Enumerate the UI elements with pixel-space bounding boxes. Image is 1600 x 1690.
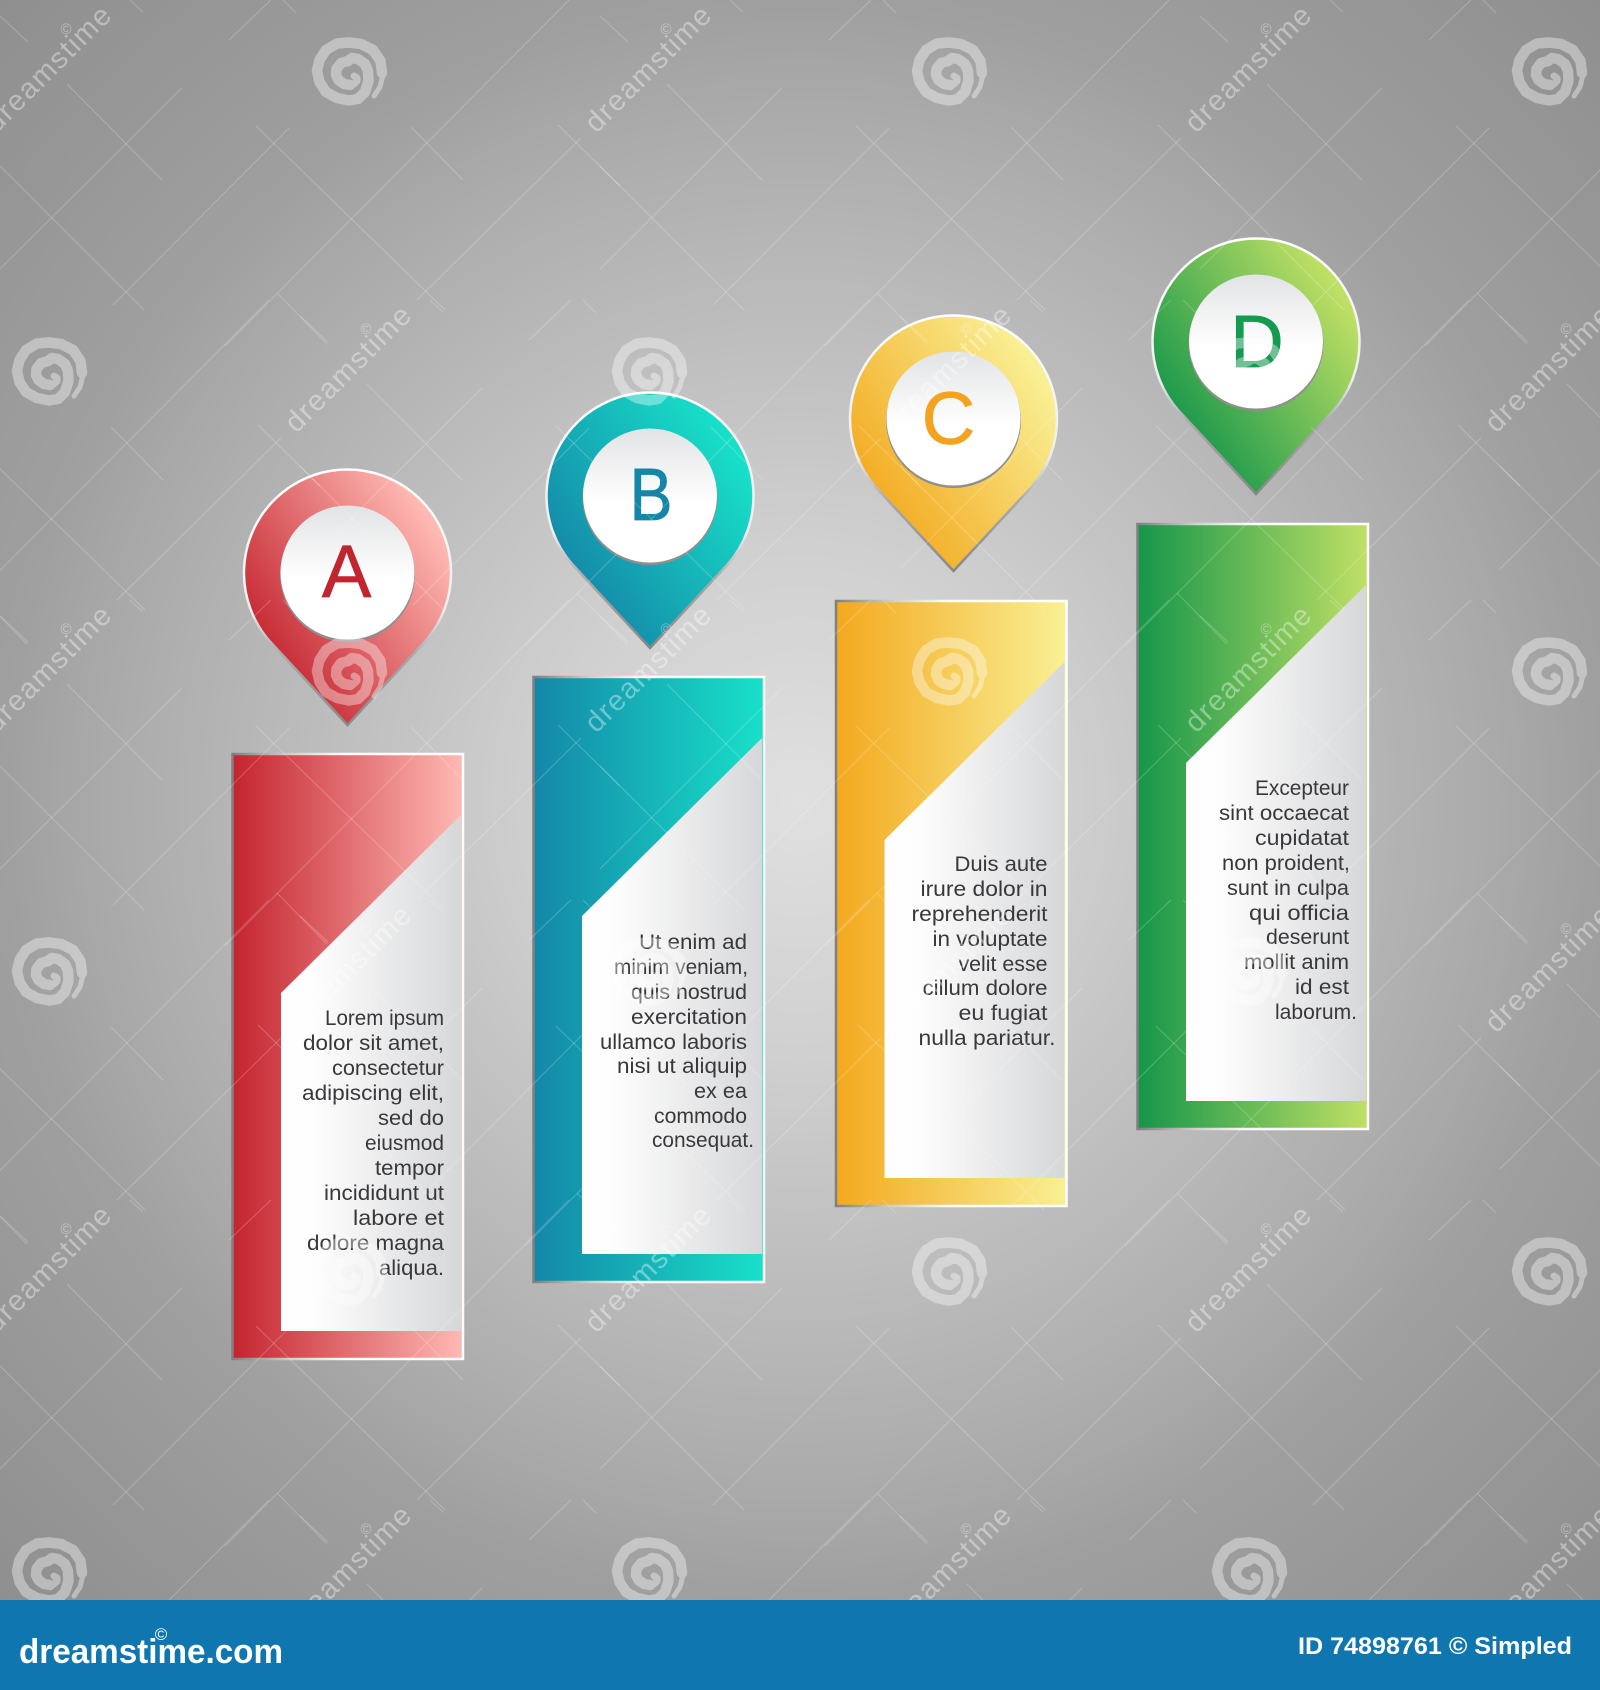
letter A: A xyxy=(322,530,372,613)
text C: cillum dolore xyxy=(922,976,1048,1000)
watermark overlay: © xyxy=(660,621,672,638)
text D xyxy=(1219,776,1357,1024)
text A: sed do xyxy=(378,1106,444,1130)
text B: ex ea xyxy=(694,1079,747,1103)
text D: sunt in culpa xyxy=(1227,876,1349,900)
text A: dolor sit amet, xyxy=(303,1031,444,1055)
footer credit: ID 74898761 © Simpled xyxy=(1298,1633,1572,1660)
watermark overlay: © xyxy=(1560,321,1572,338)
watermark overlay: © xyxy=(60,621,72,638)
watermark overlay: dreamstime xyxy=(579,1200,718,1339)
watermark overlay: © xyxy=(1260,1221,1272,1238)
footer logo: dreamstime.com xyxy=(19,1633,283,1671)
watermark overlay: © xyxy=(960,1521,972,1538)
footer bar xyxy=(0,1600,1600,1690)
text B: nisi ut aliquip xyxy=(617,1054,747,1078)
watermark overlay: © xyxy=(360,1521,372,1538)
watermark overlay: dreamstime xyxy=(279,900,418,1039)
watermark overlay: dreamstime xyxy=(879,900,1018,1039)
watermark overlay: © xyxy=(1560,921,1572,938)
text C: irure dolor in xyxy=(920,877,1048,901)
text A: labore et xyxy=(353,1206,444,1230)
pin A xyxy=(244,469,451,725)
watermark overlay: dreamstime xyxy=(1179,0,1318,139)
watermark overlay: dreamstime xyxy=(1179,1200,1318,1339)
text A: eiusmod xyxy=(365,1131,444,1155)
text A: aliqua. xyxy=(379,1256,444,1280)
text A: dolore magna xyxy=(307,1231,444,1255)
watermark overlay: dreamstime xyxy=(579,600,718,739)
text D: non proident, xyxy=(1222,851,1350,875)
letter B: B xyxy=(630,453,672,536)
text C: eu fugiat xyxy=(958,1001,1048,1025)
watermark overlay: dreamstime xyxy=(879,1500,1018,1639)
card A xyxy=(232,754,463,1359)
card C xyxy=(836,601,1066,1206)
text D: mollit anim xyxy=(1244,950,1349,974)
text B xyxy=(600,930,754,1152)
watermark overlay: © xyxy=(360,921,372,938)
watermark overlay: © xyxy=(660,1221,672,1238)
watermark overlay: © xyxy=(360,321,372,338)
watermark overlay: dreamstime xyxy=(879,300,1018,439)
text A: Lorem ipsum xyxy=(325,1006,444,1030)
text B: commodo xyxy=(654,1104,747,1128)
letter D: D xyxy=(1230,300,1284,383)
text A: adipiscing elit, xyxy=(302,1081,444,1105)
text B: ullamco laboris xyxy=(600,1030,747,1054)
watermark overlay: © xyxy=(960,921,972,938)
text C: nulla pariatur. xyxy=(918,1026,1056,1050)
watermark overlay: dreamstime xyxy=(579,0,718,139)
text C: reprehenderit xyxy=(912,902,1048,926)
watermark overlay: © xyxy=(960,321,972,338)
text C xyxy=(912,852,1056,1050)
pin C xyxy=(850,315,1057,571)
text B: exercitation xyxy=(631,1005,747,1029)
text C: velit esse xyxy=(958,952,1048,976)
text C: in voluptate xyxy=(932,927,1048,951)
text B: Ut enim ad xyxy=(639,930,747,954)
watermark overlay: © xyxy=(1260,621,1272,638)
watermark overlay: © xyxy=(1260,21,1272,38)
watermark overlay: dreamstime xyxy=(1179,600,1318,739)
text D: deserunt xyxy=(1266,925,1349,949)
watermark overlay: dreamstime xyxy=(279,1500,418,1639)
card B xyxy=(534,677,764,1282)
text B: quis nostrud xyxy=(631,980,747,1004)
text D: sint occaecat xyxy=(1219,801,1349,825)
text A: tempor xyxy=(375,1156,444,1180)
letter C: C xyxy=(922,377,975,460)
watermark overlay: © xyxy=(660,21,672,38)
text B: minim veniam, xyxy=(614,955,748,979)
watermark overlay: © xyxy=(1560,1521,1572,1538)
text A: consectetur xyxy=(332,1056,444,1080)
text A: incididunt ut xyxy=(324,1181,444,1205)
text D: Excepteur xyxy=(1255,776,1349,800)
pin B xyxy=(546,392,754,648)
card D xyxy=(1138,524,1368,1129)
text C: Duis aute xyxy=(954,852,1048,876)
footer logo: © xyxy=(155,1625,168,1644)
text D: laborum. xyxy=(1275,1000,1357,1024)
text B: consequat. xyxy=(652,1128,754,1152)
text A xyxy=(302,1006,444,1280)
text D: cupidatat xyxy=(1255,826,1349,850)
watermark overlay: dreamstime xyxy=(279,300,418,439)
text D: qui officia xyxy=(1249,901,1349,925)
pin D xyxy=(1152,238,1360,494)
watermark overlay: © xyxy=(60,21,72,38)
watermark overlay: © xyxy=(60,1221,72,1238)
text D: id est xyxy=(1295,975,1349,999)
